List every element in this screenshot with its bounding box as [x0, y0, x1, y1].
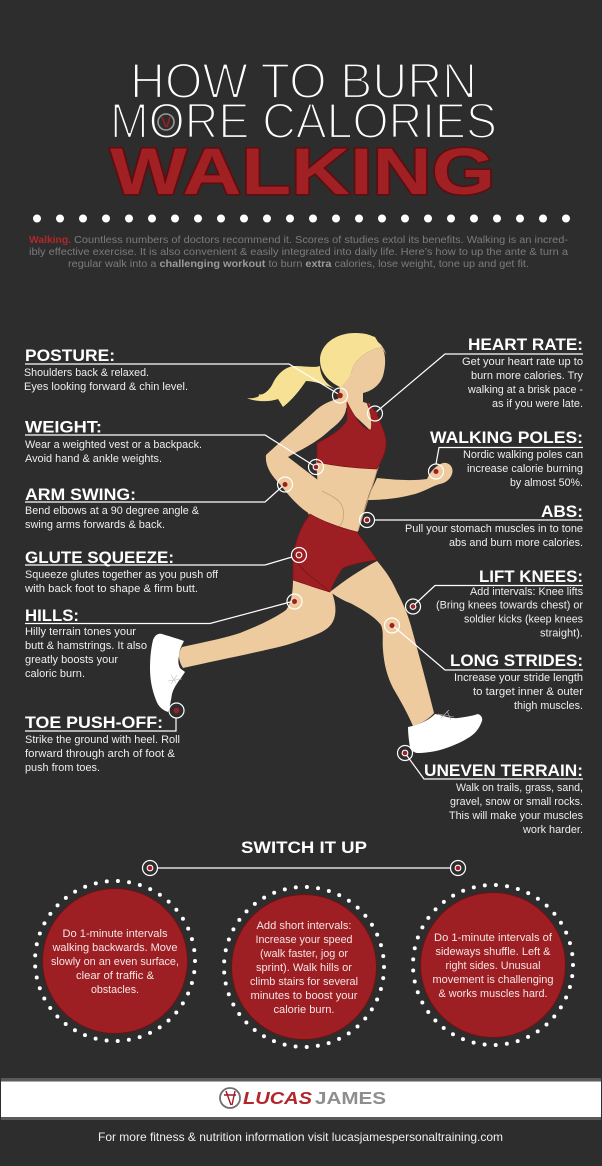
panel: sideways shuffle circle: right sides. Unusual — [446, 960, 540, 972]
callout: abs: ABS: — [541, 502, 583, 521]
callout: weight: Avoid hand & ankle weights. — [25, 453, 162, 465]
panel: short intervals circle: Add short intervals: — [256, 920, 352, 932]
callout: hills: HILLS: — [25, 606, 79, 625]
callout: abs: abs and burn more calories. — [449, 537, 583, 549]
callout: heart rate: Get your heart rate up to — [462, 356, 583, 368]
title line: more calories: MORE CALORIES — [110, 93, 497, 149]
panel: backwards intervals circle: slowly on an even surface, — [51, 956, 179, 968]
panel: short intervals circle: calorie burn. — [274, 1004, 334, 1016]
shorts — [293, 514, 377, 592]
callout: lift knees: LIFT KNEES: — [479, 567, 583, 586]
callout: long strides: thigh muscles. — [514, 700, 583, 712]
callout: weight — [25, 418, 324, 474]
callout: hills — [25, 594, 302, 680]
front leg — [330, 561, 434, 726]
panel: backwards intervals circle: obstacles. — [91, 984, 139, 996]
ponytail and hair — [247, 366, 338, 407]
callout: arm swing: ARM SWING: — [25, 485, 136, 504]
logo wordmark: james: JAMES — [315, 1088, 386, 1108]
callout: toe push-off — [25, 703, 184, 774]
callout: glute squeeze — [24, 548, 307, 595]
panel: sideways shuffle circle: Do 1-minute intervals of — [434, 932, 552, 944]
callout: uneven terrain: work harder. — [522, 824, 583, 836]
callout: long strides: to target inner & outer — [473, 686, 584, 698]
front arm — [367, 463, 453, 500]
callout: weight: Wear a weighted vest or a backpack. — [25, 439, 202, 451]
callout: abs: Pull your stomach muscles in to tone — [405, 523, 583, 535]
icon: logo inside the letter O — [158, 114, 174, 130]
title line: how to burn: HOW TO BURN — [130, 53, 477, 109]
callout: heart rate: as if you were late. — [492, 398, 583, 410]
callout: arm swing: swing arms forwards & back. — [25, 519, 165, 531]
callout: hills: caloric burn. — [25, 668, 85, 680]
panel: backwards intervals circle: walking backwards. Move — [51, 942, 178, 954]
callout: heart rate: walking at a brisk pace - — [467, 384, 583, 396]
callout: glute squeeze: with back foot to shape & firm butt. — [24, 583, 198, 595]
icon: logo mark — [220, 1088, 240, 1108]
panel: backwards intervals circle: clear of traffic & — [76, 970, 154, 982]
callout: long strides: LONG STRIDES: — [450, 651, 583, 670]
callout: toe push-off: TOE PUSH-OFF: — [25, 713, 163, 732]
panel: backwards intervals circle — [35, 881, 195, 1041]
shoe laces — [168, 675, 454, 720]
callout: glute squeeze: GLUTE SQUEEZE: — [25, 548, 174, 567]
intro text: Walking. — [29, 235, 71, 246]
callout: uneven terrain — [398, 746, 583, 836]
callout: abs — [360, 502, 583, 549]
intro text: ibly effective exercise. It is also convenient & easily integrated into daily life. Here’s how to up the ante & turn a — [29, 247, 568, 258]
panel: sideways shuffle circle: & works muscles hard. — [438, 988, 548, 1000]
callout: heart rate: burn more calories. Try — [471, 370, 584, 382]
callout: uneven terrain: UNEVEN TERRAIN: — [424, 761, 583, 780]
back shoe — [150, 634, 185, 712]
connector between switch it up markers — [142, 860, 466, 876]
head and neck — [338, 347, 385, 432]
callout: lift knees — [406, 567, 583, 640]
callout: glute squeeze: Squeeze glutes together as you push off — [25, 569, 218, 581]
hair cap — [320, 333, 386, 388]
panel: short intervals circle: sprint). Walk hills or — [256, 962, 352, 974]
callout: posture: Shoulders back & relaxed. — [24, 367, 149, 379]
panel: short intervals circle: Increase your speed — [256, 934, 353, 946]
back leg — [179, 578, 335, 668]
intro text: Countless numbers of doctors recommend it. Scores of studies extol its benefits. Walking is an incred- — [74, 235, 568, 246]
panel: short intervals circle: minutes to boost your — [250, 990, 358, 1002]
sports bra — [317, 402, 386, 469]
runner figure — [150, 333, 482, 753]
callout: lift knees: Add intervals: Knee lifts — [470, 586, 583, 598]
torso side crease — [358, 470, 377, 531]
back arm — [266, 398, 346, 527]
panel: sideways shuffle circle: sideways shuffle. Left & — [436, 946, 550, 958]
panel: backwards intervals circle: Do 1-minute intervals — [62, 928, 168, 940]
callout: hills: greatly boosts your — [25, 654, 118, 666]
panel: sideways shuffle circle — [413, 885, 573, 1045]
footer text: For more fitness & nutrition information visit lucasjamespersonaltraining.com — [98, 1130, 503, 1144]
panel: short intervals circle: (walk faster, jog or — [260, 948, 348, 960]
panel: short intervals circle — [224, 887, 384, 1047]
callout: toe push-off: Strike the ground with heel. Roll — [25, 734, 180, 746]
callout: toe push-off: forward through arch of foot & — [25, 748, 175, 760]
callout: walking poles: increase calorie burning — [467, 463, 583, 475]
callout: uneven terrain: This will make your muscles — [449, 810, 583, 822]
callout: uneven terrain: gravel, snow or small rocks. — [450, 796, 583, 808]
callout: lift knees: straight). — [540, 628, 583, 640]
intro text: regular walk into a challenging workout to burn extra calories, lose weight, tone up and get fit. — [68, 259, 529, 270]
intro text — [29, 235, 568, 270]
title line: walking: WALKING — [110, 134, 495, 208]
callout: posture — [24, 346, 348, 403]
callout: posture: POSTURE: — [25, 346, 115, 365]
title — [110, 53, 497, 208]
logo wordmark: lucas: LUCAS — [243, 1088, 312, 1108]
callout: heart rate: HEART RATE: — [468, 335, 583, 354]
callout: weight: WEIGHT: — [25, 418, 102, 436]
callout: walking poles — [428, 428, 583, 489]
front shoe — [408, 714, 482, 753]
shorts seam — [293, 552, 330, 592]
callout: hills: Hilly terrain tones your — [25, 626, 136, 638]
panel: short intervals circle: climb stairs for several — [250, 976, 358, 988]
callout: walking poles: Nordic walking poles can — [463, 449, 583, 461]
callout: arm swing: Bend elbows at a 90 degree angle & — [25, 505, 199, 517]
callout: toe push-off: push from toes. — [25, 762, 100, 774]
callout: long strides: Increase your stride length — [454, 672, 583, 684]
forearm crease — [322, 491, 344, 527]
callout: lift knees: (Bring knees towards chest) or — [436, 600, 583, 612]
callout: long strides — [384, 618, 584, 712]
midriff — [308, 458, 379, 534]
callout: heart rate — [368, 335, 584, 421]
callout: posture: Eyes looking forward & chin level. — [24, 381, 188, 393]
callout: uneven terrain: Walk on trails, grass, sand, — [456, 782, 583, 794]
callout: lift knees: soldier kicks (keep knees — [464, 614, 583, 626]
heading: switch it up: SWITCH IT UP — [241, 839, 367, 857]
logo band — [1, 1078, 601, 1120]
panel: sideways shuffle circle: movement is challenging — [432, 974, 554, 986]
callout: hills: butt & hamstrings. It also — [25, 640, 147, 652]
callout: walking poles: WALKING POLES: — [430, 428, 583, 447]
dotted divider — [37, 214, 567, 222]
callout: arm swing — [25, 477, 292, 531]
callout: walking poles: by almost 50%. — [510, 477, 583, 489]
